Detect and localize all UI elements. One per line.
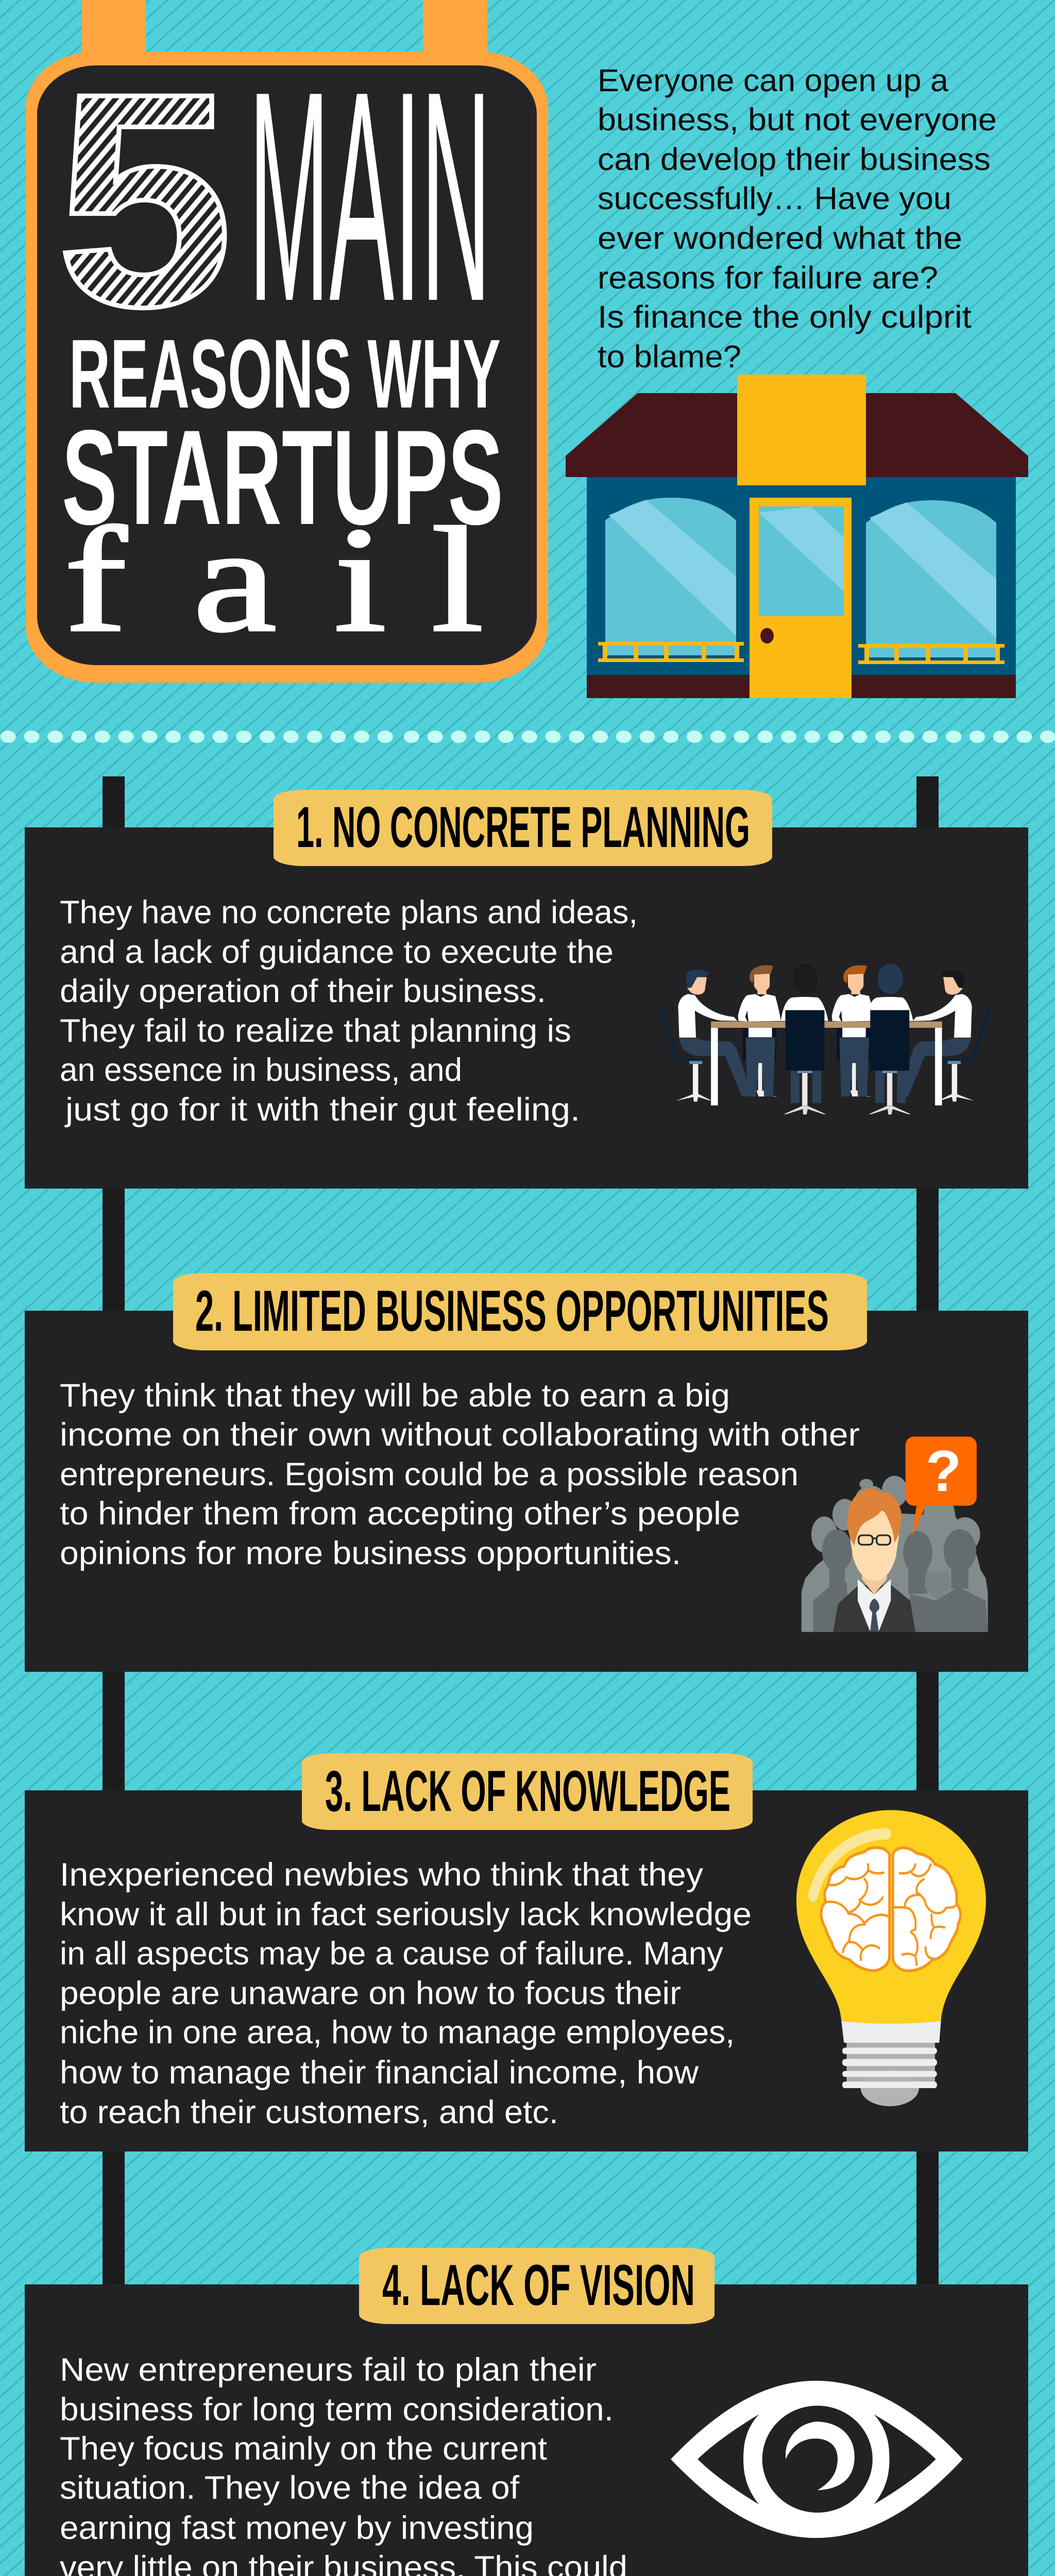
text block: reason 4: They focus mainly on the current <box>60 2431 548 2467</box>
text block: reason 3: know it all but in fact seriously lack knowledge <box>60 1896 752 1933</box>
icon: storefront house <box>566 375 1028 698</box>
icon: person in a crowd with question bubble: ? <box>926 1438 961 1504</box>
text block: reason 4: New entrepreneurs fail to plan their <box>60 2352 597 2388</box>
intro text block: business, but not everyone <box>598 102 997 137</box>
text block: reason 2 <box>60 1378 860 1571</box>
text block: reason 4: earning fast money by investing <box>60 2510 534 2546</box>
text block: reason 3: Inexperienced newbies who think that they <box>60 1857 704 1893</box>
intro text block <box>598 63 997 374</box>
text block: reason 3: niche in one area, how to manage employees, <box>60 2014 735 2050</box>
text: MAIN <box>249 29 491 364</box>
intro text block: ever wondered what the <box>598 221 962 256</box>
title: REASONS WHY: REASONS WHY <box>69 319 501 429</box>
text block: reason 4: business for long term consideration. <box>60 2392 614 2428</box>
panel: reason 1 <box>25 790 1028 1189</box>
title: STARTUPS: STARTUPS <box>62 402 503 553</box>
intro text block: Everyone can open up a <box>598 63 948 98</box>
heading: limited business opportunities <box>173 1273 867 1350</box>
text block: reason 2: to hinder them from accepting other’s people <box>60 1496 740 1532</box>
text block: reason 2: income on their own without collaborating with other <box>60 1417 860 1453</box>
text block: reason 1: daily operation of their business. <box>60 973 546 1009</box>
heading: lack of knowledge: 3. LACK OF KNOWLEDGE <box>325 1759 730 1823</box>
text block: reason 1: They fail to realize that planning is <box>60 1013 571 1049</box>
text block: reason 1: They have no concrete plans and ideas, <box>60 894 638 930</box>
heading: no concrete planning <box>274 790 772 866</box>
intro text block: Is finance the only culprit <box>598 299 972 334</box>
text block: reason 1: an essence in business, and <box>60 1052 462 1088</box>
heading: lack of vision <box>359 2248 714 2324</box>
intro text block: reasons for failure are? <box>598 260 938 295</box>
text block: reason 1: and a lack of guidance to execute the <box>60 934 614 970</box>
intro text block: successfully… Have you <box>598 181 951 216</box>
title: fail: fail <box>64 497 484 663</box>
text block: reason 3: how to manage their financial income, how <box>60 2055 699 2091</box>
icon: light bulb with brain <box>796 1810 986 2106</box>
text block: reason 3: in all aspects may be a cause of failure. Many <box>60 1936 723 1972</box>
panel: reason 3 <box>25 1753 1028 2151</box>
icon: eye <box>671 2381 963 2538</box>
text block: reason 2: entrepreneurs. Egoism could be a possible reason <box>60 1456 798 1493</box>
text block: reason 1 <box>60 894 638 1128</box>
text block: reason 4: situation. They love the idea of <box>60 2470 520 2506</box>
panel: title sign board <box>26 0 548 683</box>
title: number 5: 5 <box>56 30 233 370</box>
panel: reason 4 <box>25 2248 1028 2576</box>
text block: reason 2: They think that they will be able to earn a big <box>60 1378 730 1414</box>
text block: reason 2: opinions for more business opportunities. <box>60 1535 681 1571</box>
heading: lack of knowledge <box>302 1753 753 1830</box>
icon: team meeting at a table <box>659 964 991 1114</box>
icon: person in a crowd with question bubble <box>802 1436 988 1632</box>
panel: reason 2 <box>25 1273 1028 1672</box>
text block: reason 3 <box>60 1857 752 2130</box>
sign posts <box>103 776 939 2576</box>
text block: reason 1: just go for it with their gut feeling. <box>64 1092 580 1128</box>
text block: reason 3: to reach their customers, and etc. <box>60 2094 558 2130</box>
intro text block: can develop their business <box>598 142 991 177</box>
intro text block: to blame? <box>598 339 741 374</box>
heading: lack of vision: 4. LACK OF VISION <box>382 2253 695 2317</box>
text block: reason 3: people are unaware on how to focus their <box>60 1975 681 2011</box>
text block: reason 4 <box>60 2352 710 2576</box>
